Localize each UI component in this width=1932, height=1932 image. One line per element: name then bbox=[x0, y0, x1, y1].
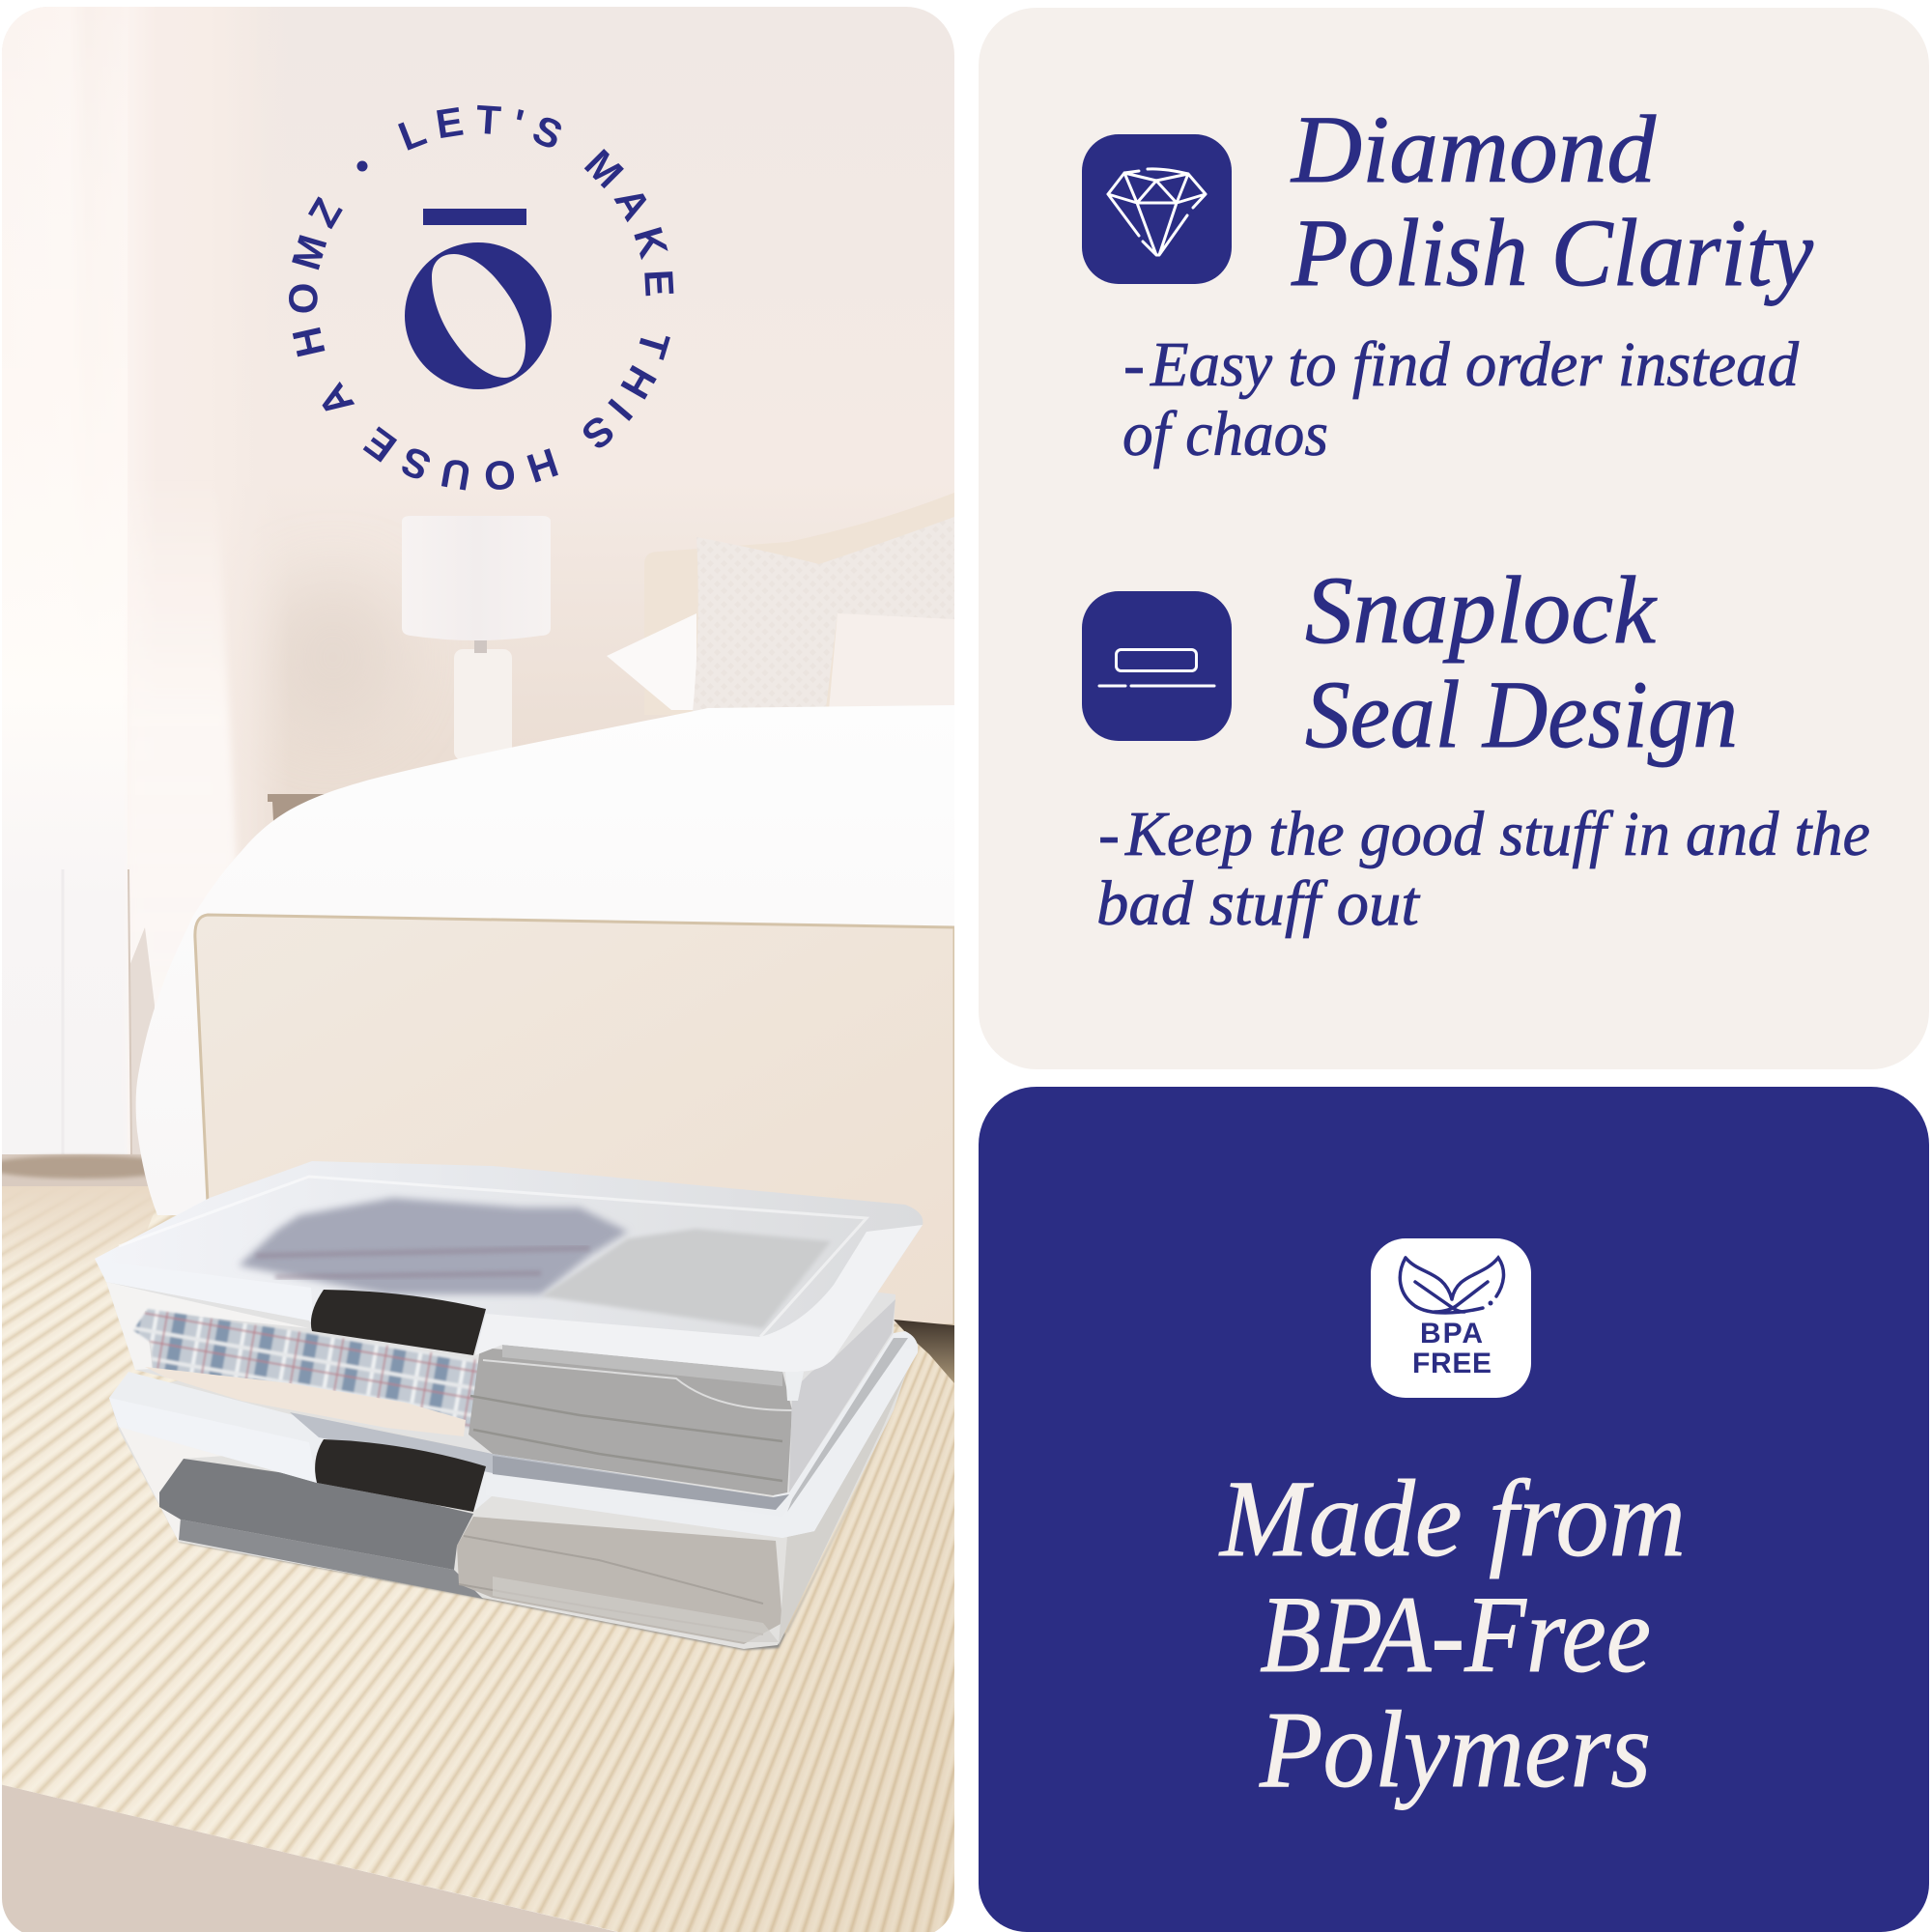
pillows bbox=[607, 517, 954, 723]
heading: Made from BPA-Free Polymers bbox=[1218, 1459, 1686, 1810]
heading: Snaplock Seal Design: Snaplock bbox=[1305, 556, 1658, 664]
text: snaplock description: bad stuff out bbox=[1096, 868, 1421, 939]
icon: BPA free: BPA bbox=[1420, 1318, 1483, 1350]
text: snaplock description bbox=[1096, 799, 1870, 939]
upper storage box bbox=[95, 1161, 923, 1510]
wall bbox=[236, 7, 954, 853]
panel: bedroom photo bbox=[0, 0, 956, 1932]
heading: Diamond Polish Clarity bbox=[1290, 96, 1814, 306]
icon: BPA free bbox=[1371, 1238, 1531, 1398]
logo mark bbox=[405, 209, 552, 389]
under-bench shadow bbox=[894, 1320, 954, 1383]
folded grey clothes bbox=[469, 1348, 792, 1495]
headboard bbox=[644, 493, 954, 580]
rug shade bbox=[2, 1186, 155, 1256]
sweater seen through lid bbox=[541, 1229, 831, 1328]
upper latch bbox=[311, 1290, 486, 1355]
floor bbox=[0, 1154, 638, 1932]
wall shadow bbox=[298, 605, 370, 684]
icon: snaplock bbox=[1082, 591, 1232, 741]
text: diamond description: Easy to find order instead bbox=[1150, 329, 1800, 400]
heading: Made from BPA-Free Polymers: BPA-Free bbox=[1260, 1575, 1651, 1695]
logo badge: LET'S MAKE THIS HOUSE A HOMZ bbox=[289, 104, 674, 491]
folded cream sweater bbox=[145, 1367, 466, 1436]
icon: BPA free: FREE bbox=[1412, 1348, 1492, 1379]
lower storage box bbox=[109, 1331, 918, 1650]
folded dark clothes bbox=[159, 1459, 473, 1570]
text: diamond description bbox=[1122, 329, 1800, 469]
heading: Snaplock Seal Design: Seal Design bbox=[1305, 661, 1738, 768]
dot bbox=[357, 160, 367, 172]
heading: Diamond Polish Clarity: Polish Clarity bbox=[1291, 199, 1814, 306]
heading: Made from BPA-Free Polymers: Polymers bbox=[1259, 1690, 1651, 1810]
panel: features bbox=[979, 8, 1929, 1069]
bench bbox=[195, 915, 954, 1325]
duvet bbox=[136, 705, 954, 1215]
text: snaplock description: Keep the good stuff in and the bbox=[1124, 799, 1870, 869]
shirt seen through lid bbox=[239, 1198, 628, 1294]
text: snaplock description: - bbox=[1098, 799, 1120, 869]
nightstand bbox=[268, 794, 325, 821]
lid bbox=[95, 1161, 923, 1372]
rug bbox=[0, 1159, 956, 1932]
folded light clothes bbox=[457, 1517, 782, 1644]
icon: diamond bbox=[1082, 134, 1232, 284]
lower latch bbox=[315, 1439, 486, 1512]
lid rim bbox=[119, 1177, 867, 1337]
curtain bbox=[2, 7, 263, 1154]
text: diamond description: of chaos bbox=[1122, 399, 1328, 469]
floor shadow bbox=[0, 1155, 179, 1179]
text: diamond description: - bbox=[1123, 329, 1145, 400]
panel: BPA free bbox=[979, 1087, 1929, 1932]
folded plaid shirt bbox=[133, 1309, 480, 1430]
circular slogan bbox=[317, 133, 645, 462]
heading: Snaplock Seal Design bbox=[1305, 556, 1738, 768]
heading: Made from BPA-Free Polymers: Made from bbox=[1218, 1459, 1686, 1579]
lamp bbox=[402, 516, 551, 760]
heading: Diamond Polish Clarity: Diamond bbox=[1290, 96, 1657, 203]
lower lid bbox=[109, 1331, 918, 1538]
